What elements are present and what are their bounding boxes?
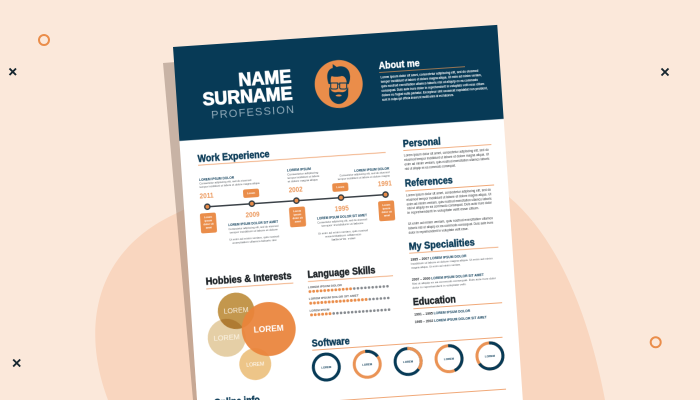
- job text 1991: Consectetur adipiscing elit, sed do eiusmod: [339, 170, 390, 178]
- job text 2009: exercitation ullamco laboris nisi: [232, 238, 277, 245]
- references text: laboris nisi ut aliquip ex ea commodo consequat. Duis aute irure: [408, 221, 494, 230]
- job text 2009: LOREM IPSUM DOLOR SIT AMET: [228, 220, 279, 227]
- header band: [173, 25, 504, 141]
- about me heading: About me: [378, 58, 420, 72]
- heading: work experience: Work Experience: [197, 149, 270, 165]
- mouth: [336, 95, 342, 97]
- references text: nisi ut aliquip ex ea commodo consequat. Duis aute irure dolor: [407, 201, 493, 211]
- donut 3: LOREM: [403, 359, 414, 364]
- tag box 2002: [289, 206, 306, 227]
- heading rule: [403, 144, 491, 150]
- job text 2011: [199, 174, 260, 189]
- label tan: LOREM: [214, 334, 240, 343]
- ring: top left: [39, 35, 49, 45]
- speciality two: Nisi ut aliquip ex ea commodo consequat. Duis aute irure dolor: [412, 276, 496, 286]
- job text 2002: [287, 167, 320, 184]
- timeline node 1991: [383, 192, 388, 197]
- panel: software: [311, 326, 505, 382]
- heading: education: Education: [413, 294, 456, 308]
- tag box 2011: dolor sit: [203, 222, 214, 226]
- references text: Lorem ipsum dolor sit amet, consectetur adipiscing elit, sed do: [406, 188, 491, 197]
- label gold: LOREM: [223, 307, 249, 316]
- glasses: [329, 83, 349, 89]
- personal text: eiusmod tempor incididunt ut labore et dolore magna aliqua. Ut: [404, 152, 489, 162]
- job text 1995: LOREM IPSUM DOLOR SIT AMET: [317, 213, 368, 220]
- heading: my specialities: My Specialities: [409, 238, 476, 253]
- references text: enim ad minim veniam, quis nostrud exercitation ullamco laboris: [407, 196, 492, 206]
- timeline axis: [207, 195, 386, 207]
- panel: education: [413, 291, 503, 324]
- job text 2011: LOREM IPSUM DOLOR: [199, 176, 235, 182]
- skill row three: LOREM IPSUM: [309, 307, 330, 313]
- heading rule: [312, 337, 503, 350]
- references text: dolor in reprehenderit in voluptate velit esse.: [409, 227, 469, 235]
- profession: PROFESSION: [211, 104, 295, 122]
- bubble chart: [205, 289, 299, 383]
- heading rule: [413, 303, 502, 309]
- about me paragraph: sunt in culpa qui officia deserunt mollit anim id est laborum.: [382, 93, 454, 102]
- cross: left top: [10, 68, 16, 75]
- year 2002: 2002: [289, 187, 303, 194]
- label orange: LOREM: [253, 324, 284, 335]
- tag box 2011: amet: [206, 225, 212, 230]
- heading: hobbies: Hobbies & Interests: [205, 271, 292, 288]
- tag box 2002: dolor sit: [292, 216, 303, 220]
- personal text: enim ad minim veniam, quis nostrud exercitation ullamco laboris: [404, 157, 490, 167]
- heading: personal: Personal: [402, 136, 441, 150]
- donut 4: LOREM: [444, 356, 455, 361]
- heading rule: [206, 283, 293, 289]
- ring: bottom right: [651, 337, 661, 347]
- job text 2002: tempor incididunt ut labore: [287, 174, 320, 180]
- tag box 2002: ipsum: [293, 212, 302, 217]
- donut 4: [435, 345, 463, 373]
- tag box 1991: [378, 200, 395, 221]
- bubble: orange: [240, 300, 297, 358]
- donut 2: LOREM: [362, 362, 373, 367]
- job text 1995: Consectetur adipiscing elit, sed do eiusmod: [317, 217, 368, 224]
- about me paragraph: quis nostrud exercitation ullamco laboris nisi ut aliquip ex ea commodo: [381, 78, 478, 88]
- job text 2009: Consectetur adipiscing elit, sed do eiusmod: [228, 224, 279, 231]
- timeline node 1995: [338, 195, 344, 200]
- job text 1991: tempor incididunt ut labore et dolore magna: [338, 174, 390, 181]
- panel: language skills: [307, 264, 395, 315]
- peach blob: [95, 166, 605, 400]
- speciality two: dolor in reprehenderit in voluptate velit.: [412, 282, 467, 290]
- donut 3: [394, 348, 422, 375]
- surname: SURNAME: [202, 84, 293, 110]
- job text 2009: Ut enim ad minim veniam, quis nostrud: [229, 234, 280, 242]
- personal text: [404, 148, 490, 171]
- year 2009: 2009: [245, 211, 260, 219]
- about me paragraph: Lorem ipsum dolor sit amet, consectetur adipiscing elit, sed do eiusmod: [380, 69, 478, 79]
- bottom rule: [316, 389, 506, 400]
- tag box 2002: Lorem: [293, 209, 302, 213]
- job text 2009: [228, 220, 280, 245]
- panel: hobbies and interests: [204, 271, 300, 383]
- heading: references: References: [404, 175, 454, 190]
- references text: Ut enim ad minim veniam, quis nostrud exercitation ullamco: [408, 216, 493, 226]
- tag box 1991: dolor sit: [381, 209, 392, 214]
- speciality one: 1985 – 2007 LOREM IPSUM DOLOR: [410, 254, 467, 262]
- job text 1995: [317, 213, 369, 243]
- panel: online info: [214, 378, 506, 400]
- panel: references: [404, 173, 497, 235]
- heading rule: [308, 276, 393, 282]
- speciality one: Incididunt ut labore et dolore magna aliqua. Ut enim ad minim: [411, 256, 493, 266]
- tag box 1991: ipsum: [383, 206, 391, 211]
- tag box 1991: amet: [384, 213, 390, 218]
- heading rule: [409, 247, 498, 253]
- tag box 1995: [332, 182, 349, 192]
- bubble: tan: [206, 318, 247, 358]
- panel: my specialities: [409, 236, 501, 290]
- tag box 2009: [243, 188, 259, 198]
- speciality two: [412, 272, 496, 290]
- about me paragraph: dolore eu fugiat nulla pariatur. Excepteur sint occaecat cupidatat non proident,: [382, 86, 488, 97]
- job text 1995: Ut enim ad minim veniam, quis nostrud: [318, 228, 368, 236]
- speciality two: 2007 – 2000 LOREM IPSUM DOLOR SIT AMET: [412, 273, 485, 282]
- job text 2002: et dolore magna aliqua: [288, 177, 318, 184]
- cross: right top: [662, 68, 668, 76]
- job text 1995: tempor incididunt ut labore: [321, 221, 364, 228]
- panel: work experience: [196, 141, 396, 250]
- donut 5: LOREM: [485, 354, 496, 358]
- heading: software: Software: [311, 336, 351, 350]
- about me rule: [379, 67, 465, 73]
- heading: language skills: Language Skills: [307, 265, 376, 281]
- tag box 1995: Lorem: [336, 185, 345, 189]
- job text 2002: Consectetur adipiscing: [287, 170, 319, 177]
- panel: personal: [402, 133, 493, 171]
- hair: [327, 64, 350, 84]
- page shadow: [163, 62, 197, 400]
- about me paragraph: [380, 68, 488, 102]
- job text 2011: tempor incididunt ut labore et dolore magna aliqua: [199, 181, 260, 189]
- references text: in reprehenderit in voluptate velit esse cillum.: [407, 206, 479, 215]
- tag box 2011: Lorem: [204, 215, 213, 219]
- education item one: 1991 – 1995 LOREM IPSUM DOLOR: [414, 309, 471, 317]
- page sheet: [173, 25, 531, 400]
- timeline node 2009: [249, 201, 255, 206]
- speciality one: magna aliqua. Ut enim ad minim veniam.: [411, 263, 461, 270]
- donut 5: [476, 342, 504, 370]
- education item two: 1995 – 2002 LOREM IPSUM DOLOR SIT AMET: [415, 315, 488, 324]
- about me paragraph: consequat. Duis aute irure dolor in reprehenderit in voluptate velit esse cillum: [381, 82, 484, 93]
- donut 1: LOREM: [321, 365, 332, 369]
- heading rule: [405, 185, 494, 191]
- job text 1995: laboris nisi: [331, 236, 356, 242]
- tag box 2009: Lorem: [247, 191, 256, 195]
- name: NAME: [238, 67, 292, 90]
- timeline node 2011: [205, 204, 210, 210]
- icon: bearded avatar: [315, 60, 363, 108]
- donut 2: [352, 349, 382, 379]
- job text 1991: LOREM IPSUM DOLOR: [354, 167, 390, 173]
- job text 2002: LOREM IPSUM: [287, 167, 311, 173]
- heading rule: [198, 152, 386, 165]
- job text 1991: [337, 167, 390, 181]
- bubble: light orange: [238, 347, 272, 381]
- job text 2011: Consectetur adipiscing elit, sed do eiusmod: [199, 178, 252, 186]
- personal text: nisi ut aliquip ex ea commodo consequat.: [405, 164, 456, 171]
- about me paragraph: tempor incididunt ut labore et dolore magna aliqua. Ut enim ad minim veniam,: [381, 73, 482, 84]
- skill row two: LOREM IPSUM DOLOR SIT AMET: [309, 294, 359, 301]
- tag box 2011: ipsum: [204, 218, 213, 223]
- label light orange: LOREM: [246, 362, 265, 369]
- bubble: gold: [217, 291, 256, 330]
- beard: [329, 87, 348, 104]
- references text: eiusmod tempor incididunt ut labore et dolore magna aliqua. Ut: [406, 192, 491, 202]
- speciality one: [410, 252, 494, 270]
- tag box 2011: [200, 212, 217, 234]
- year 1991: 1991: [378, 180, 392, 188]
- tag box 2002: amet: [295, 219, 301, 224]
- tag box 1991: Lorem: [382, 203, 391, 207]
- resume page: [173, 25, 531, 400]
- year 2011: 2011: [199, 193, 214, 201]
- year 1995: 1995: [335, 205, 349, 213]
- personal text: Lorem ipsum dolor sit amet, consectetur adipiscing elit, sed do: [404, 148, 489, 158]
- avatar disc: [315, 60, 363, 108]
- job text 2009: tempor incididunt ut labore et dolore: [230, 227, 278, 235]
- donut 1: [312, 353, 340, 381]
- cross: left bottom: [13, 360, 20, 366]
- header background: [173, 25, 504, 141]
- job text 1995: exercitation ullamco: [325, 232, 362, 239]
- timeline node 2002: [294, 198, 299, 203]
- references text: [406, 188, 495, 235]
- skill row one: LOREM IPSUM DOLOR: [308, 283, 343, 289]
